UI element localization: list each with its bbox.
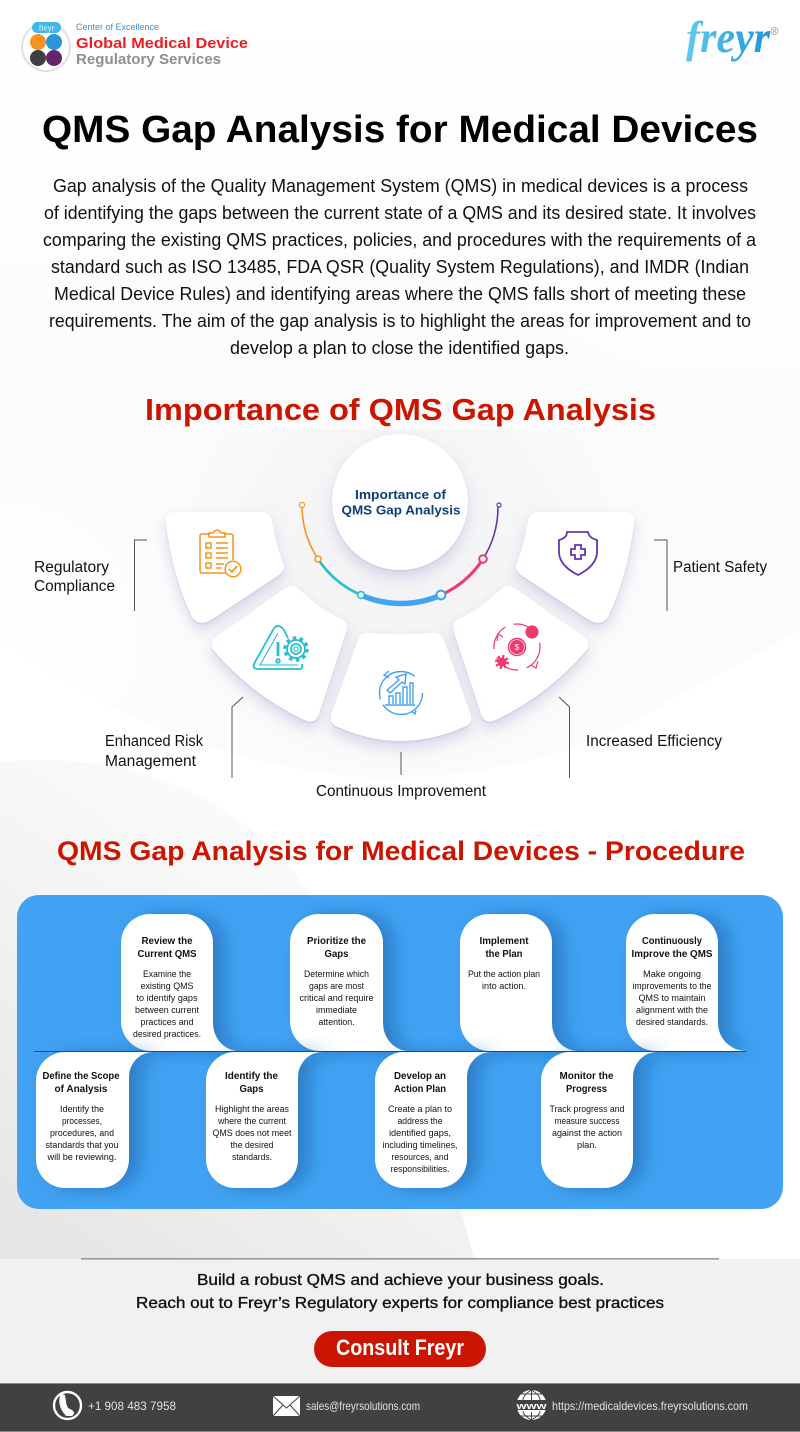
- center circle: QMS Gap Analysis: [342, 504, 461, 518]
- call to action band: [0, 1258, 800, 1383]
- card: Implement the Plan: the Plan: [486, 949, 522, 960]
- freyr logo: freyr: [686, 13, 771, 62]
- card: Review the Current QMS: Review the: [142, 936, 193, 947]
- card: Identify the Gaps: the desired: [230, 1140, 274, 1150]
- intro paragraph: comparing the existing QMS practices, policies, and procedures with the requirements of a: [43, 230, 757, 250]
- card: Review the Current QMS: Examine the: [143, 969, 191, 979]
- card: Implement the Plan: Implement: [480, 936, 529, 947]
- card: Continuously Improve the QMS: QMS to maintain: [638, 993, 706, 1003]
- card: Define the Scope of Analysis: of Analysis: [54, 1084, 108, 1095]
- card: Identify the Gaps: Highlight the areas: [215, 1104, 289, 1114]
- card: Develop an Action Plan: address the: [398, 1116, 442, 1126]
- leader line: patient safety: [654, 540, 667, 611]
- card: Continuously Improve the QMS: improvements to the: [632, 981, 712, 991]
- leader line: increased efficiency: [559, 697, 570, 778]
- card: Continuously Improve the QMS: alignment with the: [636, 1005, 708, 1015]
- petal: regulatory compliance: [166, 512, 284, 623]
- card: Develop an Action Plan: identified gaps,: [389, 1128, 451, 1138]
- card: Define the Scope of Analysis: processes,: [62, 1116, 102, 1126]
- intro paragraph: [43, 176, 757, 358]
- card: Develop an Action Plan: [375, 1052, 491, 1188]
- card: Develop an Action Plan: responsibilities.: [390, 1164, 450, 1174]
- card: Review the Current QMS: [121, 914, 237, 1051]
- button: Consult Freyr: Consult Freyr: [336, 1335, 464, 1360]
- header logo: Global Medical Device Regulatory Services: Center of Excellence: [76, 22, 159, 32]
- card: Continuously Improve the QMS: desired standards.: [636, 1017, 708, 1027]
- title: QMS Gap Analysis for Medical Devices: [42, 109, 758, 151]
- label: regulatory compliance: [34, 559, 115, 595]
- petal: increased efficiency: [453, 586, 589, 722]
- heading: Importance of QMS Gap Analysis: Importance of QMS Gap Analysis: [145, 392, 656, 427]
- header logo: Global Medical Device Regulatory Services: freyr: [39, 24, 55, 32]
- panel: procedure timeline: [17, 895, 783, 1209]
- card: Develop an Action Plan: Create a plan to: [388, 1104, 452, 1114]
- label: enhanced risk management: [105, 733, 203, 770]
- card: Monitor the Progress: Monitor the: [560, 1071, 614, 1082]
- card: Define the Scope of Analysis: Define the Scope: [42, 1071, 120, 1082]
- label: regulatory compliance: Regulatory: [34, 559, 109, 576]
- petal: patient safety: [516, 512, 634, 623]
- card: Review the Current QMS: practices and: [140, 1017, 194, 1027]
- card: Prioritize the Gaps: Determine which: [304, 969, 369, 979]
- card: Review the Current QMS: Current QMS: [138, 949, 197, 960]
- call to action band: Build a robust QMS and achieve your business goals.: [197, 1272, 604, 1289]
- intro paragraph: requirements. The aim of the gap analysis is to highlight the areas for improvement and to: [49, 311, 751, 331]
- card: Implement the Plan: into action.: [482, 981, 526, 991]
- header logo: Global Medical Device Regulatory Services: [22, 22, 248, 71]
- card: Monitor the Progress: plan.: [577, 1140, 597, 1150]
- card: Prioritize the Gaps: Prioritize the: [307, 936, 366, 947]
- icon: globe www: www: [515, 1401, 548, 1411]
- card: Identify the Gaps: QMS does not meet: [212, 1128, 292, 1138]
- card: Monitor the Progress: Progress: [566, 1084, 607, 1095]
- header logo: Global Medical Device Regulatory Services: Global Medical Device: [76, 35, 248, 52]
- leader line: enhanced risk management: [232, 697, 243, 778]
- petal diagram: [166, 434, 634, 741]
- card: Define the Scope of Analysis: standards that you: [46, 1140, 118, 1150]
- card: Prioritize the Gaps: gaps are most: [309, 981, 364, 991]
- card: Implement the Plan: [460, 914, 576, 1051]
- label: patient safety: Patient Safety: [673, 559, 767, 576]
- card: Prioritize the Gaps: critical and require: [300, 993, 374, 1003]
- intro paragraph: of identifying the gaps between the current state of a QMS and its desired state. It involves: [44, 203, 756, 223]
- icon: phone: [54, 1392, 81, 1419]
- label: continuous improvement: Continuous Improvement: [316, 783, 487, 800]
- label: enhanced risk management: Management: [105, 753, 197, 770]
- card: Define the Scope of Analysis: Identify the: [60, 1104, 104, 1114]
- card: Identify the Gaps: Gaps: [240, 1084, 264, 1095]
- center circle: [332, 434, 468, 570]
- heading: procedure: QMS Gap Analysis for Medical Devices - Procedure: [57, 836, 745, 866]
- gradient arc with nodes: [300, 502, 501, 604]
- card: Review the Current QMS: to identify gaps: [136, 993, 198, 1003]
- card: Prioritize the Gaps: immediate: [316, 1005, 357, 1015]
- card: Monitor the Progress: [541, 1052, 657, 1188]
- card: Define the Scope of Analysis: procedures, and: [50, 1128, 114, 1138]
- card: Continuously Improve the QMS: Make ongoing: [643, 969, 701, 979]
- card: Continuously Improve the QMS: Continuously: [642, 936, 702, 947]
- icon: envelope: [273, 1396, 300, 1416]
- card: Prioritize the Gaps: attention.: [318, 1017, 354, 1027]
- card: Review the Current QMS: existing QMS: [140, 981, 194, 991]
- card: Define the Scope of Analysis: [36, 1052, 153, 1188]
- card: Develop an Action Plan: resources, and: [392, 1152, 448, 1162]
- card: Define the Scope of Analysis: will be reviewing.: [46, 1152, 116, 1162]
- intro paragraph: Medical Device Rules) and identifying areas where the QMS falls short of meeting these: [54, 284, 746, 304]
- phone number: +1 908 483 7958: [88, 1399, 176, 1413]
- card: Implement the Plan: Put the action plan: [468, 969, 540, 979]
- icon: globe www: [514, 1390, 549, 1420]
- button: Consult Freyr: [314, 1331, 486, 1367]
- intro paragraph: Gap analysis of the Quality Management System (QMS) in medical devices is a process: [53, 176, 748, 196]
- card: Identify the Gaps: [206, 1052, 322, 1188]
- label: increased efficiency: Increased Efficiency: [586, 733, 722, 750]
- leader line: regulatory compliance: [134, 540, 147, 611]
- card: Develop an Action Plan: Action Plan: [394, 1084, 446, 1095]
- card: Review the Current QMS: between current: [135, 1005, 199, 1015]
- card: Prioritize the Gaps: Gaps: [324, 949, 349, 960]
- footer contact bar: [0, 1383, 800, 1432]
- leader line: continuous improvement: [400, 752, 402, 775]
- label: enhanced risk management: Enhanced Risk: [105, 733, 203, 750]
- card: Prioritize the Gaps: [290, 914, 407, 1051]
- label: regulatory compliance: Compliance: [34, 578, 115, 595]
- card: Develop an Action Plan: Develop an: [394, 1071, 446, 1082]
- intro paragraph: standard such as ISO 13485, FDA QSR (Quality System Regulations), and IMDR (Indian: [51, 257, 749, 277]
- petal: enhanced risk management: [211, 586, 347, 722]
- card: Identify the Gaps: where the current: [217, 1116, 286, 1126]
- call to action band: Reach out to Freyr’s Regulatory experts for compliance best practices: [136, 1295, 664, 1312]
- website: https://medicaldevices.freyrsolutions.com: [552, 1399, 748, 1413]
- petal: increased efficiency: $: [515, 643, 520, 652]
- email: sales@freyrsolutions.com: [306, 1399, 420, 1413]
- card: Review the Current QMS: desired practices.: [133, 1029, 201, 1039]
- card: Identify the Gaps: Identify the: [225, 1071, 278, 1082]
- card: Identify the Gaps: standards.: [232, 1152, 272, 1162]
- card: Monitor the Progress: measure success: [554, 1116, 620, 1126]
- petal: continuous improvement: [331, 633, 471, 741]
- card: Monitor the Progress: Track progress and: [550, 1104, 624, 1114]
- card: Develop an Action Plan: including timelines,: [382, 1140, 458, 1150]
- header logo: Global Medical Device Regulatory Services: Regulatory Services: [76, 51, 221, 68]
- card: Continuously Improve the QMS: [626, 914, 746, 1051]
- intro paragraph: develop a plan to close the identified gaps.: [230, 338, 569, 358]
- card: Continuously Improve the QMS: Improve the QMS: [632, 949, 713, 960]
- card: Monitor the Progress: against the action: [552, 1128, 622, 1138]
- freyr logo: R: [773, 29, 777, 35]
- center circle: Importance of: [355, 488, 447, 502]
